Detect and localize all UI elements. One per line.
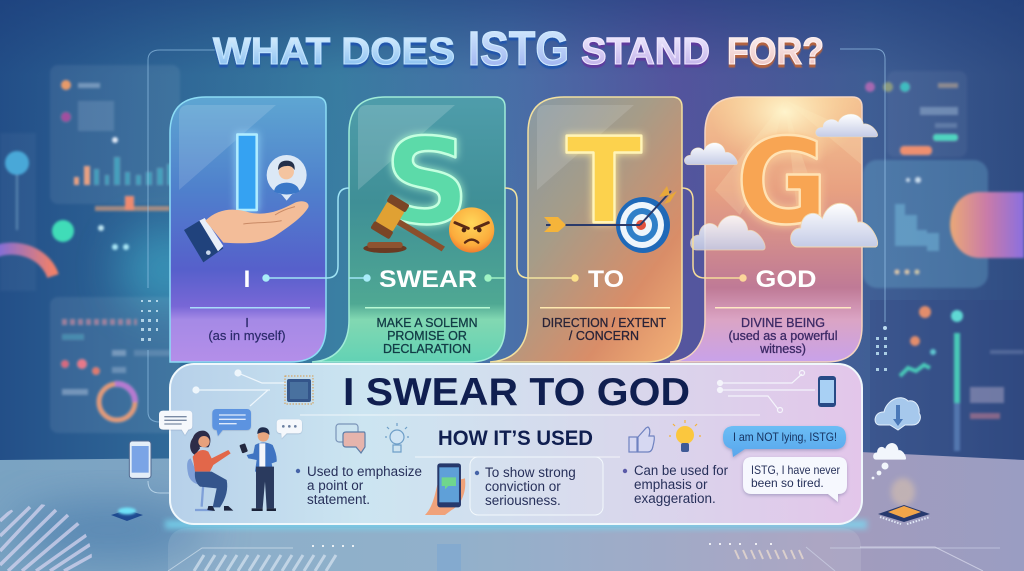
- definition: To: DIRECTION / EXTENT: [542, 316, 666, 330]
- icon: chat bubbles: [336, 424, 365, 453]
- label: SWEAR: SWEAR: [379, 266, 477, 293]
- man standing: [239, 427, 277, 511]
- striped circle: [0, 504, 98, 571]
- icon: thought cloud: [872, 443, 906, 479]
- icon: hand holding phone: [425, 463, 465, 515]
- definition: Swear: PROMISE OR: [387, 329, 467, 343]
- title: [213, 23, 824, 76]
- title: FOR?: [727, 31, 824, 73]
- bullet: emphasize: [296, 464, 422, 507]
- definition: To: / CONCERN: [569, 329, 639, 343]
- panel: T card for To: [490, 97, 682, 362]
- bullet: exaggeration: emphasis or: [634, 477, 708, 492]
- definition: Swear: DECLARATION: [383, 342, 471, 356]
- woman seated: [187, 431, 233, 511]
- floating phone left: [129, 441, 151, 478]
- left dashboard panels: [0, 65, 180, 433]
- label: GOD: GOD: [756, 266, 816, 293]
- floor reflection: [168, 528, 1000, 571]
- icon: target and arrows: [544, 186, 677, 253]
- circuit decoration right: [718, 370, 815, 412]
- title: STAND: [581, 31, 710, 73]
- bullet: emphasize: Used to emphasize: [307, 464, 422, 479]
- panel: S card for Swear: [312, 97, 505, 362]
- big letter S: S: [384, 114, 470, 252]
- conviction box: [470, 457, 603, 515]
- floating blue chip left: [111, 508, 143, 521]
- icon: gavel: [363, 194, 445, 253]
- headline: I SWEAR TO GOD: [343, 371, 690, 414]
- icon: glowing chip right: [878, 478, 930, 524]
- icon: angry emoji: [449, 207, 494, 253]
- speech bubbles: [159, 409, 302, 438]
- chat bubble: so tired: ISTG, I have never: [751, 463, 840, 477]
- icon: open hand: [184, 201, 309, 262]
- gradient pill: [950, 192, 1024, 258]
- icon: chip: [285, 376, 313, 404]
- big letter G: G: [736, 114, 828, 252]
- clouds: [684, 114, 878, 250]
- panel: G card for God: [670, 96, 878, 363]
- circuit decoration left: [193, 370, 286, 406]
- right connector and dots: [840, 49, 887, 371]
- icon: person badge: [267, 155, 307, 201]
- chat bubble: not lying: [723, 426, 846, 457]
- definition: God: DIVINE BEING: [741, 316, 825, 330]
- definition: Swear: MAKE A SOLEMN: [376, 316, 478, 330]
- definition: God: witness): [759, 342, 806, 356]
- icon: download cloud: [875, 398, 920, 430]
- big letter I: I: [228, 115, 266, 235]
- title: WHAT DOES: [213, 31, 455, 73]
- label: TO: TO: [588, 266, 624, 293]
- bullet: emphasize: a point or: [307, 478, 364, 493]
- title: ISTG: [468, 23, 569, 76]
- left dot grid and connector: [141, 50, 216, 493]
- sun rays: [716, 97, 862, 228]
- conviction box: To show strong: [485, 465, 576, 480]
- chat bubble: so tired: been so tired.: [751, 476, 824, 490]
- label: I: I: [244, 266, 250, 293]
- icon: glowing bulb: [669, 420, 701, 452]
- connectors between cards: [262, 188, 747, 282]
- definition: I: (as in myself): [208, 328, 286, 343]
- conviction box: seriousness.: [485, 493, 561, 508]
- subheading: HOW IT’S USED: [438, 427, 593, 450]
- bullet: exaggeration: [623, 463, 728, 506]
- panel: I swear to God usage: [159, 364, 867, 529]
- bullet: emphasize: statement.: [307, 492, 370, 507]
- icon: phone top right: [818, 376, 836, 407]
- chat bubble: not lying: I am NOT lying, ISTG!: [733, 430, 837, 444]
- big letter T: T: [566, 113, 642, 251]
- definition: God: (used as a powerful: [728, 329, 838, 343]
- icon: thumbs up: [629, 427, 654, 452]
- chat bubble: so tired: [743, 457, 847, 502]
- floating orbs and gauge: [0, 137, 129, 276]
- conviction box: conviction or: [485, 479, 561, 494]
- definition: I: I: [245, 315, 249, 330]
- people illustration: [159, 409, 302, 511]
- right dashboard panels: [863, 71, 1024, 451]
- bullet: exaggeration: Can be used for: [634, 463, 728, 478]
- bullet: exaggeration: exaggeration.: [634, 491, 716, 506]
- icon: outline light bulb: [385, 423, 409, 452]
- panel: I card: [170, 97, 326, 362]
